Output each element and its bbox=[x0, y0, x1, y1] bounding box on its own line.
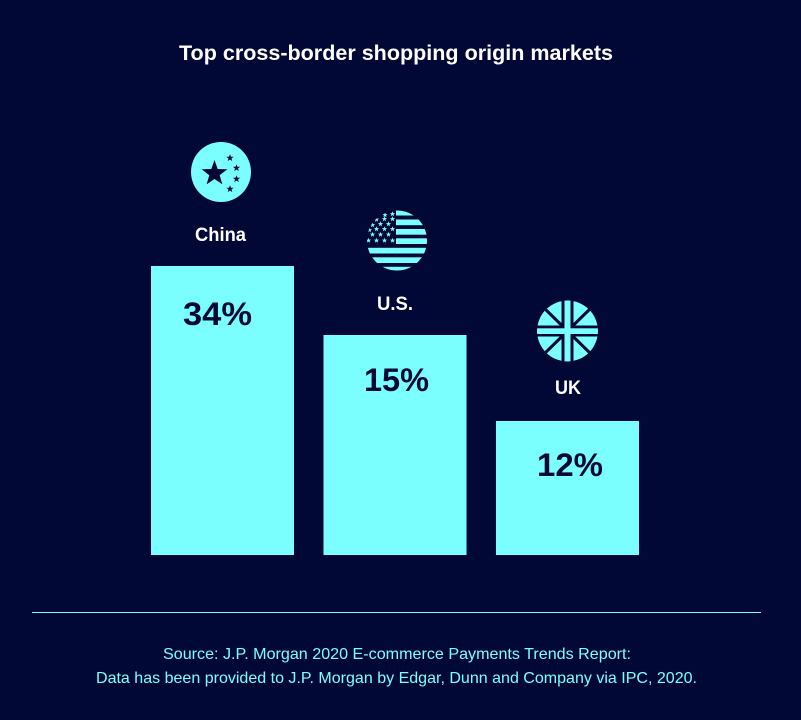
source note bbox=[96, 646, 697, 687]
bar: U.S. bbox=[324, 335, 466, 555]
title: Top cross-border shopping origin markets bbox=[179, 42, 613, 65]
label: U.S.: U.S. bbox=[377, 294, 413, 315]
value: UK 12%: 12% bbox=[537, 447, 603, 483]
value: U.S. 15%: 15% bbox=[364, 362, 429, 398]
value: China 34%: 34% bbox=[183, 296, 252, 332]
source note: Data has been provided to J.P. Morgan by Edgar, Dunn and Company via IPC, 2020. bbox=[96, 670, 697, 687]
icon: US flag bbox=[366, 210, 428, 272]
label: UK: UK bbox=[555, 378, 581, 399]
bar: China bbox=[151, 266, 294, 555]
bar: UK bbox=[496, 421, 639, 555]
icon: UK flag bbox=[536, 300, 599, 362]
source note: Source: J.P. Morgan 2020 E-commerce Payments Trends Report: bbox=[163, 646, 631, 663]
icon: China flag bbox=[191, 142, 251, 202]
label: China: China bbox=[195, 225, 246, 246]
